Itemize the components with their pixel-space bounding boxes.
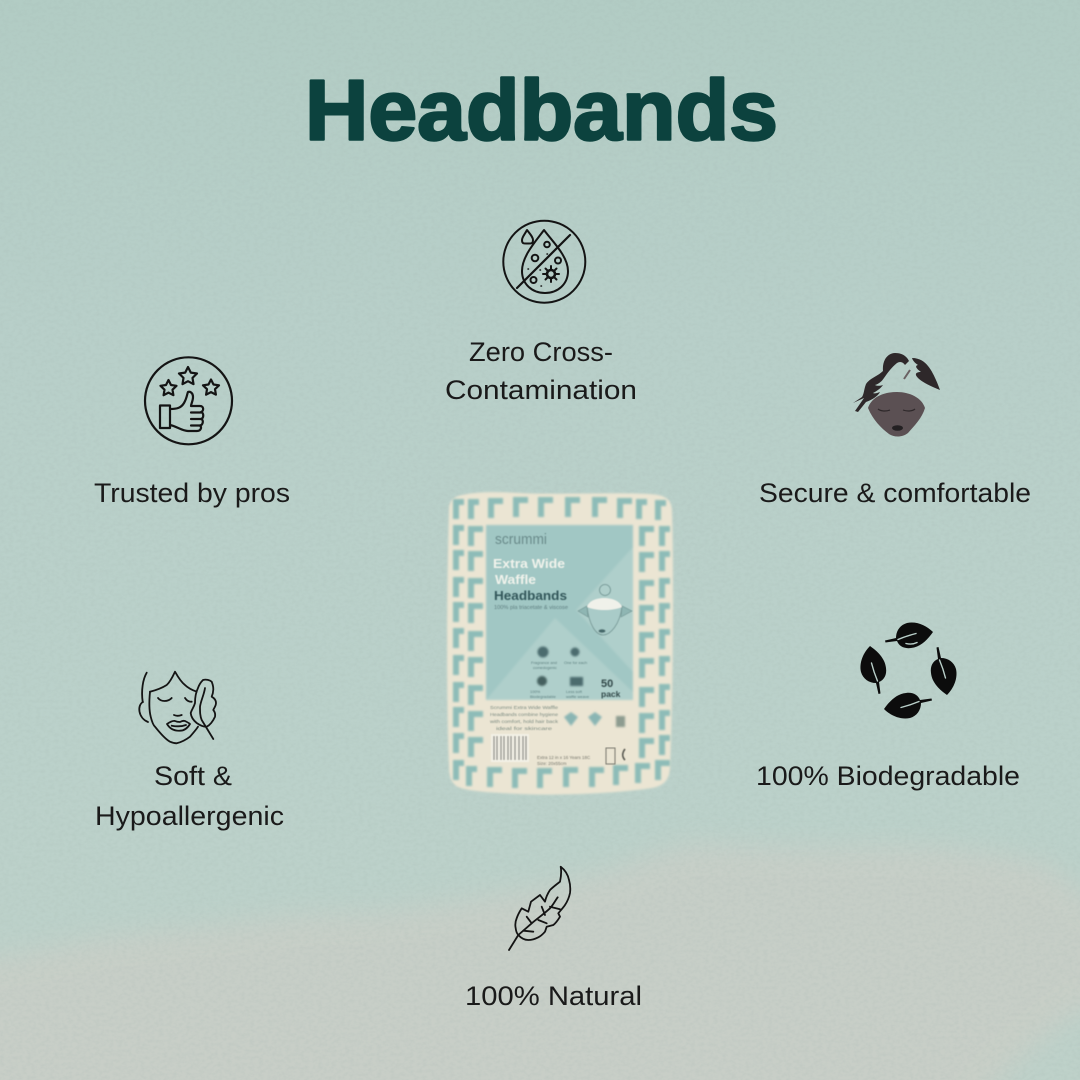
package text: Biodegradable [530,694,557,699]
icon: face with feather [139,672,216,743]
package text: Scrummi Extra Wide Waffle [490,705,559,710]
package text: Fragrance and [531,660,557,665]
package text [490,531,621,731]
package details: Extra 12 in x 16 Years 18C [537,755,591,760]
label: zero cross-contamination: Zero Cross- [469,337,613,367]
package text: ideal for skincare [496,726,553,731]
pattern of teal corner marks [453,497,670,788]
package text: scrummi [495,531,547,548]
icon: crossed-out drop [503,221,585,303]
label: secure & comfortable: Secure & comfortable [759,478,1031,508]
package text: One for each [564,660,587,665]
headband illustration [578,584,632,635]
package body [447,492,673,795]
feature: soft & hypoallergenic [95,672,284,831]
barcode [491,734,529,762]
package text: Extra Wide [493,557,565,571]
label: 100% natural: 100% Natural [465,981,642,1011]
feature: zero cross-contamination [445,221,637,405]
package text: 100% [530,689,541,694]
label: soft & hypoallergenic: Soft & [154,761,232,791]
package text: comedogenic [533,665,557,670]
icon: thumbs up with stars [145,357,232,444]
label panel [486,525,633,700]
label: 100% biodegradable: 100% Biodegradable [756,761,1020,791]
package details [537,748,625,766]
package text: Headbands [494,589,567,603]
package text: Less soft [566,689,583,694]
feature: trusted by pros [94,357,290,508]
icon: face with headband [853,353,940,437]
label: zero cross-contamination: Contamination [445,375,637,405]
label: soft & hypoallergenic: Hypoallergenic [95,801,284,831]
package text: Waffle [495,573,536,587]
package text: 100% pla triacetate & viscose [494,605,568,611]
icon: circular leaves [860,622,957,719]
feature: 100% natural [465,867,642,1011]
feature: 100% biodegradable [756,622,1020,791]
package text: pack [601,689,621,699]
package text: 50 [601,678,613,690]
label: trusted by pros: Trusted by pros [94,478,290,508]
feature: secure & comfortable [759,353,1031,508]
product: headband package [447,492,673,795]
icon: leaf outline [509,867,570,950]
package text: with comfort, hold hair back [490,719,559,724]
package text: waffle weave [566,694,590,699]
package text: Headbands combine hygiene [490,712,559,717]
package icons [537,646,625,727]
title: Headbands [305,64,778,158]
package details: Size: 20x55cm [537,761,567,766]
